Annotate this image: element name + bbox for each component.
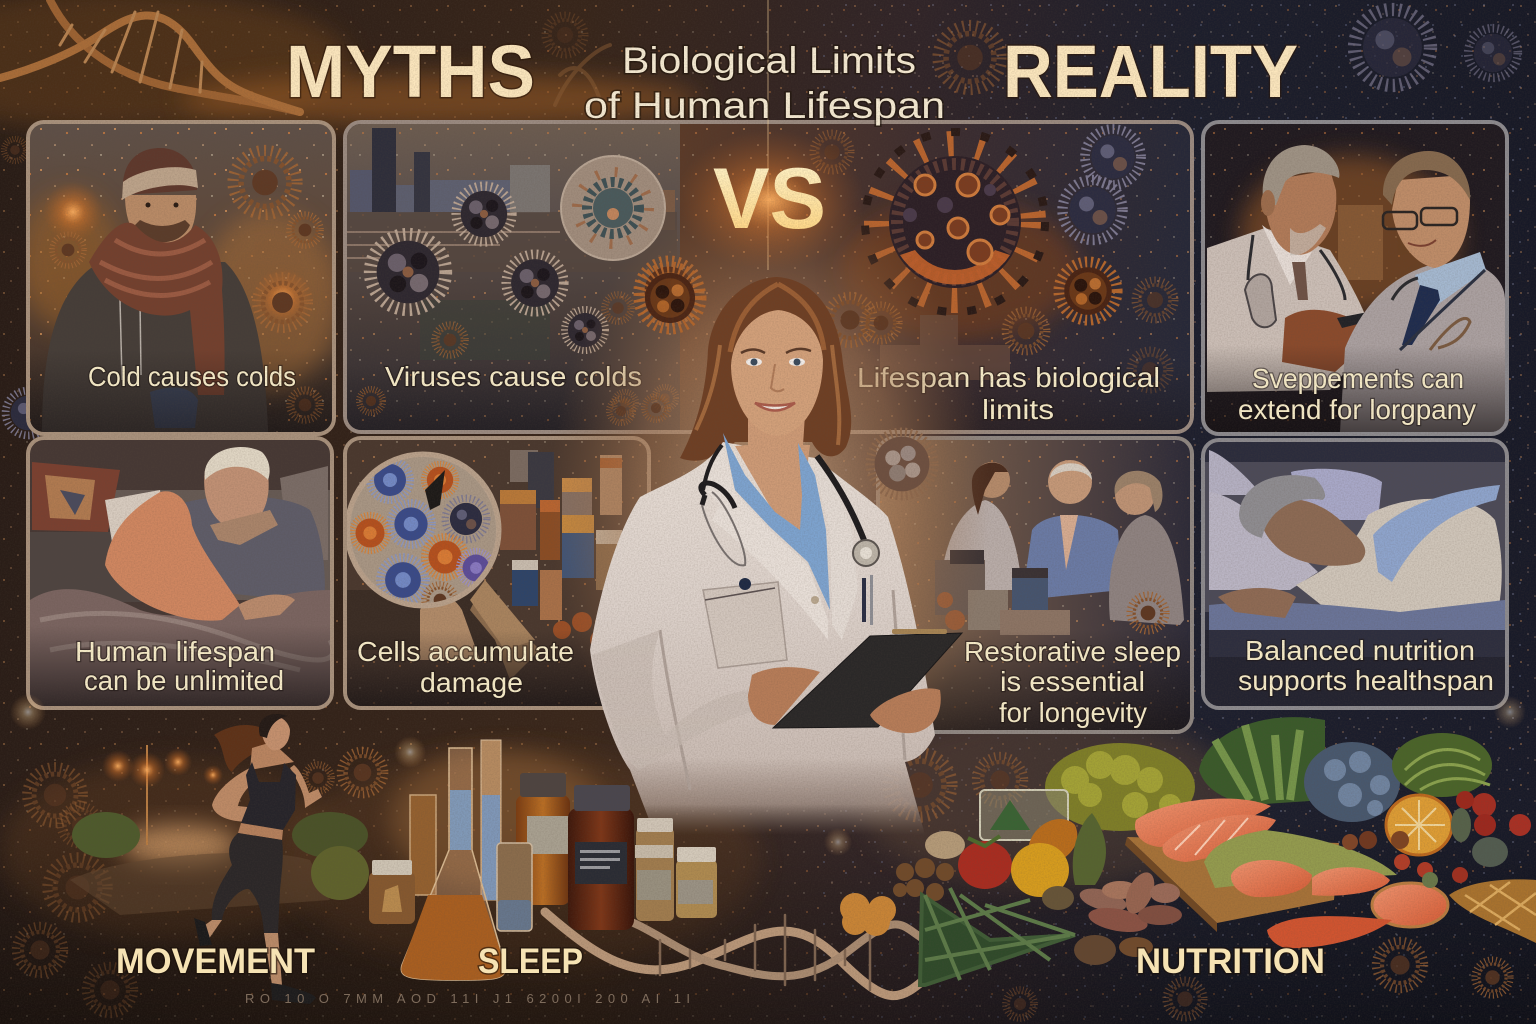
panel: cold causes colds — [20, 122, 340, 434]
caption: can be unlimited — [84, 665, 284, 696]
shirt — [185, 498, 325, 596]
label: nutrition: NUTRITION — [1136, 942, 1325, 981]
tube — [410, 795, 436, 895]
caption — [1238, 363, 1476, 425]
footer glyphs: RO 10 O 7MM AOD 11I J1 6200I 200 AI 1I — [245, 991, 690, 1006]
caption: Sveppements can — [1252, 363, 1464, 394]
title: myths: MYTHS — [286, 30, 535, 113]
caption — [75, 636, 284, 696]
caption: limits — [982, 394, 1054, 425]
small jar — [369, 860, 415, 924]
blanket — [105, 491, 240, 621]
panel: cells accumulate damage — [345, 438, 649, 708]
face — [731, 310, 823, 436]
centre glow — [550, 180, 990, 820]
salmon fillets — [1125, 799, 1448, 948]
dna helix: top left — [0, 0, 610, 112]
center viruses over glow — [604, 0, 934, 496]
caption: supports healthspan — [1238, 665, 1494, 696]
bottle a — [516, 773, 570, 905]
neck and chest — [735, 415, 810, 548]
icon: doctor looking at phone — [1207, 145, 1372, 392]
lapels — [703, 443, 828, 640]
illustration: nutrition foods — [840, 717, 1536, 985]
illustration: supplements and flasks — [369, 740, 717, 980]
medicine bottles — [500, 450, 631, 650]
bottle b — [568, 785, 634, 930]
caption: Cold causes colds — [88, 361, 296, 392]
rosemary herbs — [920, 888, 1075, 985]
shrubs — [72, 812, 369, 900]
greens — [1045, 717, 1492, 831]
beans and almonds — [1042, 868, 1182, 965]
city skyline — [350, 128, 675, 213]
title: biological limits of human lifespan: Biological Limits — [622, 40, 916, 81]
sheet — [1209, 600, 1505, 657]
panel: viruses and lifespan — [345, 122, 1192, 432]
coat — [590, 442, 935, 835]
caption — [964, 636, 1181, 728]
caption — [1238, 635, 1494, 696]
caption — [857, 362, 1160, 425]
hair highlights — [730, 284, 824, 352]
caption: Human lifespan — [75, 636, 275, 667]
icon: doctor with glasses — [1340, 151, 1505, 432]
citrus and berries — [1342, 791, 1531, 888]
bottle c — [635, 818, 674, 921]
facial features — [741, 349, 811, 353]
caption: extend for lorgpany — [1238, 394, 1476, 425]
tall tube — [481, 740, 501, 900]
panel: supplements — [1203, 122, 1507, 434]
doctor illustration — [590, 277, 962, 835]
conical flask — [401, 748, 505, 980]
label: sleep: SLEEP — [478, 942, 583, 981]
hands — [748, 667, 820, 725]
vs badge: VS — [713, 151, 826, 247]
glass sphere virus — [561, 156, 665, 260]
big orange virus — [865, 132, 1045, 312]
caption: Restorative sleep — [964, 636, 1181, 667]
bedding — [30, 589, 330, 706]
title: biological limits of human lifespan: of Human Lifespan — [584, 85, 945, 126]
vs badge — [675, 130, 865, 270]
beaker — [497, 843, 532, 931]
dna helix: bottom — [545, 912, 930, 996]
bottle d — [676, 847, 717, 918]
caption: is essential — [1000, 666, 1145, 697]
caption: Lifespan has biological — [857, 362, 1160, 393]
glass — [980, 790, 1068, 840]
icon: older man head — [204, 447, 278, 545]
caption: damage — [420, 667, 523, 698]
caption: Viruses cause colds — [385, 361, 642, 392]
caption: Balanced nutrition — [1245, 635, 1475, 666]
jars on table — [935, 550, 1166, 635]
caption — [357, 636, 574, 698]
stethoscope — [701, 483, 735, 508]
runner figure — [194, 714, 322, 1004]
title: reality: REALITY — [1003, 30, 1298, 113]
panel: restorative sleep — [878, 438, 1192, 732]
caption: Cells accumulate — [357, 636, 574, 667]
pillow — [32, 462, 120, 532]
pie — [1449, 879, 1536, 943]
icon: sleeping elder — [1218, 475, 1365, 618]
body — [1296, 499, 1502, 612]
panel: balanced nutrition sleeper — [1203, 440, 1507, 708]
caption: for longevity — [999, 697, 1147, 728]
label: movement: MOVEMENT — [116, 942, 315, 981]
icon: three people consulting — [940, 460, 1184, 625]
illustration: runner on path — [70, 714, 369, 1004]
pillows — [1209, 450, 1254, 495]
panel: unlimited lifespan myth — [28, 438, 333, 708]
vegetables left — [840, 813, 1106, 936]
blue shirt — [723, 433, 830, 610]
clipboard — [773, 633, 962, 728]
pocket — [703, 582, 787, 668]
icon: magnifying glass with cells — [346, 454, 540, 680]
title: biological limits of human lifespan — [584, 40, 945, 126]
sparkles — [10, 694, 1526, 856]
icon: man in scarf — [42, 148, 268, 432]
hair back — [680, 277, 851, 461]
